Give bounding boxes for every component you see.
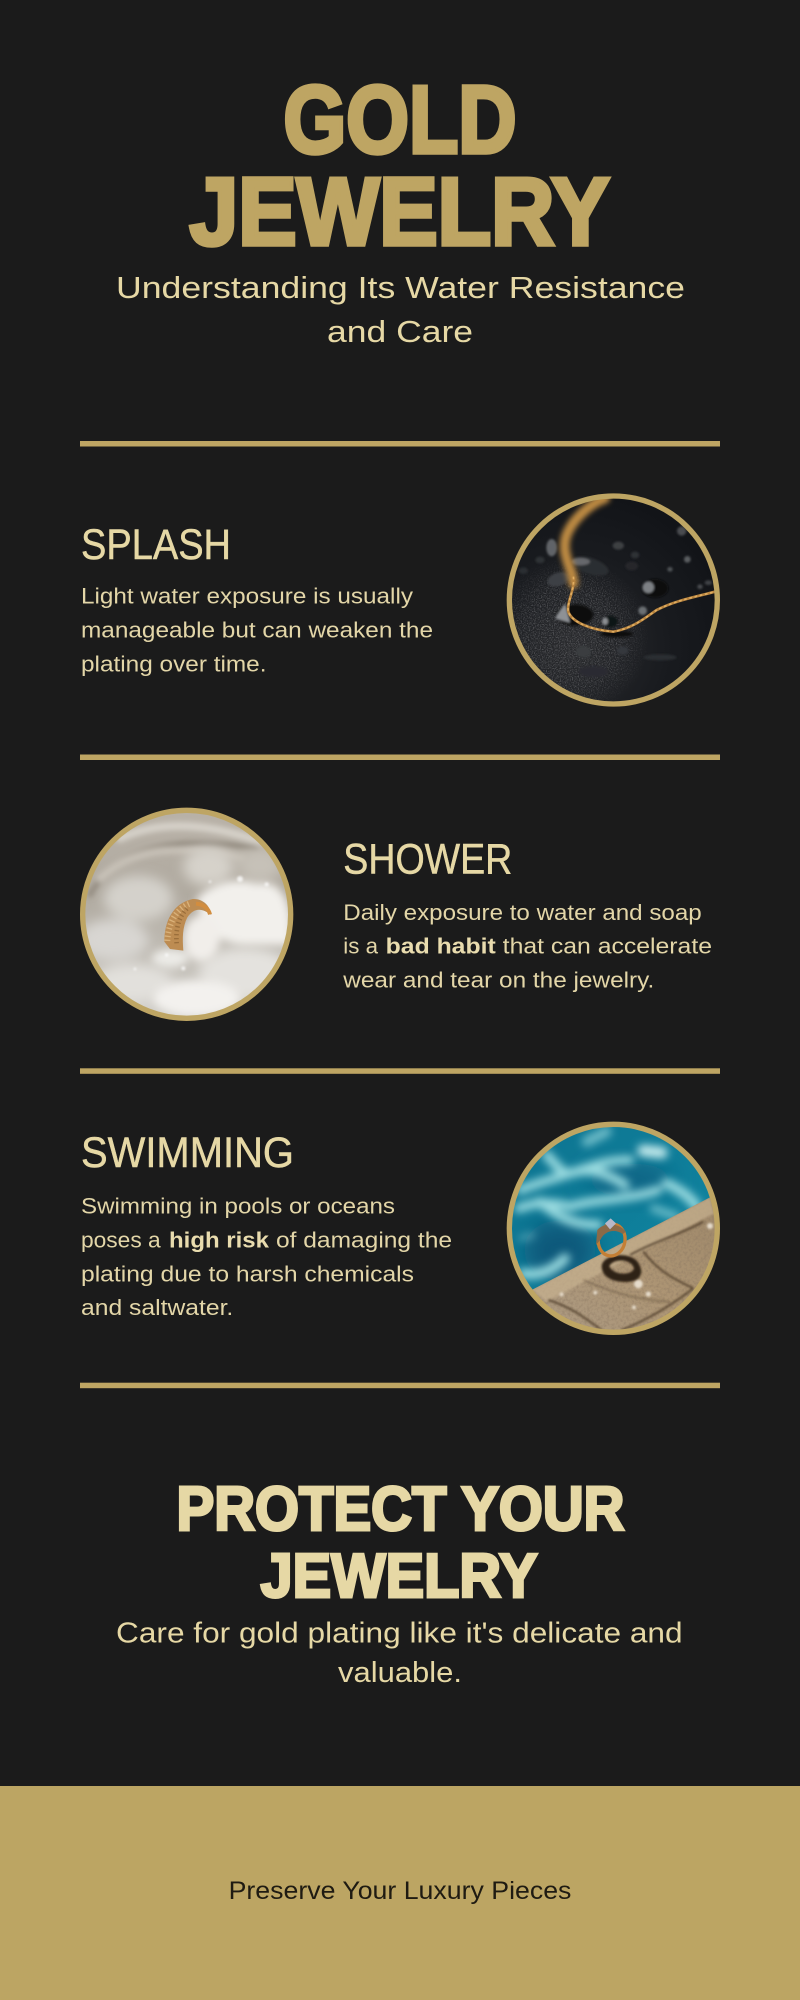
text: splash description	[81, 583, 433, 676]
text: swimming description: plating due to harsh chemicals	[81, 1261, 414, 1286]
stone ledge	[532, 1198, 715, 1330]
text: shower description: is a	[343, 933, 378, 958]
ring	[596, 1222, 628, 1258]
text: swimming description: high risk	[169, 1227, 270, 1252]
text: splash description: manageable but can weaken the	[81, 617, 433, 642]
closing heading: PROTECT YOUR	[176, 1474, 624, 1544]
heading: splash: SPLASH	[81, 521, 231, 569]
text: shower description: Daily exposure to water and soap	[343, 900, 702, 925]
footer band	[0, 1786, 800, 2000]
text: swimming description: and saltwater.	[81, 1295, 233, 1320]
closing text	[116, 1618, 683, 1689]
text: shower description: that can accelerate	[503, 933, 712, 958]
footer text: Preserve Your Luxury Pieces	[229, 1877, 571, 1905]
photo: gold ring on cotton and foam	[78, 808, 293, 1022]
closing heading: JEWELRY	[260, 1541, 538, 1611]
panel: swimming	[81, 1122, 727, 1340]
ring shadow	[602, 1255, 641, 1282]
text: shower description	[342, 900, 712, 992]
chain	[565, 498, 605, 583]
panel: shower	[78, 808, 712, 1022]
subtitle: Understanding Its Water Resistance	[116, 270, 685, 305]
subtitle	[116, 270, 685, 349]
text: splash description: Light water exposure is usually	[81, 583, 414, 608]
heading: swimming: SWIMMING	[81, 1129, 294, 1177]
closing heading	[176, 1474, 624, 1611]
title	[190, 66, 610, 266]
text: swimming description: of damaging the	[276, 1227, 452, 1252]
text: splash description: plating over time.	[81, 651, 266, 676]
closing text: valuable.	[338, 1657, 462, 1689]
text: swimming description	[81, 1193, 452, 1320]
title: JEWELRY	[190, 158, 610, 266]
photo: ring on pool edge	[507, 1122, 727, 1340]
panel: splash	[81, 493, 720, 707]
ring	[164, 899, 211, 951]
text: swimming description: poses a	[81, 1227, 161, 1252]
text: shower description: wear and tear on the jewelry.	[342, 967, 654, 992]
text: shower description: bad habit	[386, 933, 496, 958]
text: swimming description: Swimming in pools or oceans	[81, 1193, 395, 1218]
heading: shower: SHOWER	[343, 836, 512, 884]
title: GOLD	[284, 66, 516, 174]
photo: gold chain on wet black surface	[507, 493, 720, 707]
closing text: Care for gold plating like it's delicate and	[116, 1618, 683, 1650]
subtitle: and Care	[327, 314, 473, 349]
